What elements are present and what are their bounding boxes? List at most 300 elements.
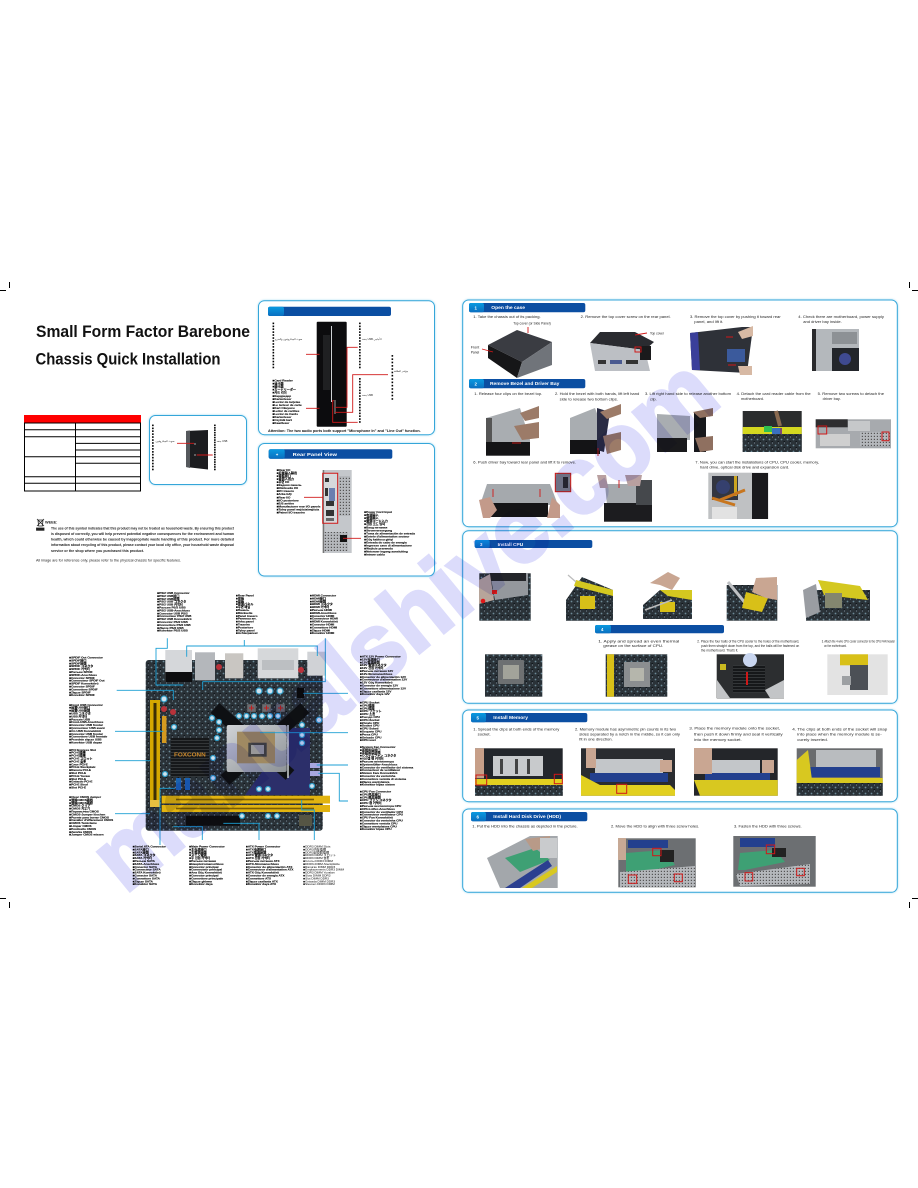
list: DDR3 slots: ■Sleuven DDR3 DIMM [303,882,335,886]
callout lines [115,638,348,845]
list: USB headers: ■USB コネクタ [69,710,91,716]
list: CPU fan: ■CPU Fan Connector [360,790,392,794]
photo: press module [694,748,778,796]
card reader list: ■讀卡器 [272,384,285,389]
power list: ■전원 코드 입력 [364,521,385,526]
list: serial ATA: ■SATA 커넥터 [133,855,152,860]
list: DDR3 slots: ■DDR3-DIMM-Steckplätze [303,862,340,866]
step text: open the case: 1. Take the chassis out of its packing. [473,315,541,319]
list: rear panel: ■背面パネル [236,601,253,606]
power list: ■Intrare cablu [364,553,385,557]
small labels: مؤشر الطاقة [394,369,409,373]
rear I/O list: ■I/O posteriore [277,498,299,502]
list: main power: ■Hauptstromanschluss [189,862,224,866]
red pointer lines [306,347,388,422]
photo: rear of chassis [590,332,654,371]
list: main power: ■Konektor daya [189,882,213,886]
list: rear connector: ■Konektor PS/2 USB [157,629,188,633]
list: USB headers: ■Front USB Connector [69,703,104,707]
step text: open the case: Panel [471,350,479,354]
list: CPU fan: ■Konektor kipas CPU [360,827,392,831]
card reader list: ■读卡器 [272,381,285,386]
list: rear connector: ■Разъем PS/2 USB [157,606,186,610]
list: HDMI connector: ■HDMI Connector [310,594,337,598]
list: CPU socket: ■CPU Socket [360,700,379,704]
heading: install memory: Install Memory [493,715,529,720]
list: PCIe slot: ■Slot PCI-E [69,771,86,775]
list: serial ATA: ■SATA Konnektörü [133,871,161,875]
list: PCIe slot: ■PCI-E Steckplatz [69,765,96,769]
list: CPU socket: ■CPU ソケット [360,708,382,713]
list: CPU fan: ■Conector da ventoinha CPU [360,818,404,822]
list: rear panel: ■背板 [236,598,245,603]
list: CPU fan: ■CPU風扇接頭 [360,794,382,799]
heading: install CPU [475,540,592,548]
list: main power: ■Conector principal [189,865,219,869]
photo: HDD fastened [733,836,816,887]
card reader list: ■Кардридер [272,394,291,398]
rear I/O list: ■Manufacturer rear I/O panels [277,504,321,508]
list: clear CMOS: ■Ponticello CMOS [69,827,96,831]
list: system fan: ■Разъем вентилятора [360,760,394,764]
side label right: منفذ USB [216,439,228,443]
list: CPU fan: ■Złącze wentylatora CPU [360,824,398,828]
list: 12V power: ■Konektor daya 12V [360,692,391,696]
rear I/O list: ■후면 I/O [277,479,290,484]
list: clear CMOS: ■清除CMOS跳线 [69,797,94,802]
list: DDR3 slots: ■DDR3 DIMM 슬롯 [303,855,329,860]
list: USB headers: ■USB 커넥터 [69,713,87,718]
list: CPU fan: ■CPU 팬 커넥터 [360,800,382,805]
photo: cpu cooler removal [479,573,531,621]
list: PCIe slot: ■Slot PCI-E [69,777,86,781]
red capacitors [161,664,304,715]
step text: open the case: 4. Check there are motherboard, power supply [798,315,884,319]
list: rear connector: ■PS/2 USB コネクタ [157,599,186,604]
list: rear panel: ■Panel trasero [236,614,258,618]
label columns: ■■■■■■■■■■■■■■ [390,355,394,400]
list: clear CMOS: ■Limpar CMOS [69,824,92,828]
list: system fan: ■System Fan Connector [360,745,396,749]
list: rear connector: ■PS/2 USB Konnektörü [157,617,192,621]
step text: remove bezel: 5. Remove two screws to detach the [818,392,884,396]
list: clear CMOS: ■Перемычка CMOS [69,810,99,814]
photo: lift driver bay [597,475,652,522]
CPU retention cross [215,708,305,780]
panel: install hard disk drive [463,809,897,892]
inset: driver bay detail [555,473,571,492]
list: ATX power: ■ATX Güç Konnektörü [246,871,279,875]
panel: front view [258,301,434,435]
list: 12V power: ■12V Güç Konnektörü [360,681,393,685]
list: USB headers: ■前置USB接頭 [69,708,91,713]
step text: install cooler: grease on the surface of CPU. [603,644,663,648]
card reader list: ■Czytnik kart [272,418,292,422]
list: DDR3 slots: ■Ranuras DIMM DDR3 [303,865,336,869]
list: CPU socket: ■CPU-voet [360,738,376,742]
photo: module notch [581,748,675,796]
power list: ■Ingresso cavo di alimentazione [364,544,412,548]
list: USB headers: ■Connecteur USB avant [69,726,105,730]
list: 12V power: ■ATX 12V Power Connector [360,654,401,658]
list: HDMI connector: ■Разъем HDMI [310,608,332,612]
list: main power: ■主电源接口 [189,846,207,851]
list: system fan: ■Systemlüfter-Anschluss [360,762,398,766]
list: SPDIF connector: ■SPDIF 커넥터 [69,666,90,671]
panel: install CPU and cooler [463,531,897,703]
photo: driver bay screws [816,419,891,448]
photo: socket closed [566,575,613,621]
list: CPU socket: ■Presa CPU [360,732,378,736]
list: system fan: ■Złącze wentylatora [360,780,390,784]
24-pin connector [186,816,240,826]
card reader list: ■Lector de tarjetas [272,400,300,404]
card reader list: ■Le lecteur de carte [272,403,302,407]
heading: remove bezel [469,379,585,388]
card reader list: ■카드 리더 [272,390,287,395]
list: system fan: ■Konektor kipas sistem [360,783,395,787]
heading: install memory: 5 [476,716,480,721]
list: DDR3 slots: ■Gniazda DIMM DDR3 [303,879,335,883]
list: system fan: ■システムファン コネクタ [360,753,396,758]
list: PCIe slot: ■PCI-E插槽 [69,750,86,755]
step text: memory: sides separated by a notch in the middle, so it can only [579,732,680,736]
list: 12V power: ■12V電源接頭 [360,659,381,664]
crop marks [0,282,918,908]
list: 12V power: ■12V电源接口 [360,656,380,661]
list: PCIe slot: ■Слот PCI-E [69,762,88,766]
step text: open the case: Front [471,346,480,350]
CPU socket [227,725,288,778]
list: 12V power: ■Conector de energia 12V [360,684,399,688]
list: clear CMOS: ■Puente para borrar CMOS [69,815,109,819]
list: 12V power: ■12V 電源コネクタ [360,662,387,667]
card reader list: ■Lector de Cards [272,412,298,416]
photo: lift bezel [657,408,713,452]
list: clear CMOS: ■Clear CMOS Jumper [69,795,102,799]
step text: remove bezel: clip. [650,398,657,402]
power list: ■Netsnoer ingang aansluiting [364,550,408,554]
photo: module seated [797,748,883,796]
heatsink: FOXCONN [174,752,206,758]
heading: install HDD: 6 [476,815,480,820]
list: ATX power: ■ATX Power Connector [246,844,281,848]
list: HDMI connector: ■Konektor HDMI [310,631,334,635]
list: rear panel: ■背板 [236,595,245,600]
list: CPU socket: ■Zócalo CPU [360,721,380,725]
photo: assembled interior [708,473,768,519]
list: 12V power: ■Разъем питания 12V [360,669,394,673]
list: USB headers: ■Konektor USB depan [69,740,102,744]
card reader list: ■Kartenleser [272,397,292,401]
list: serial ATA: ■Разъем SATA [133,859,156,863]
photo: hold bezel [570,404,621,456]
rear I/O list: ■Rear I/O [277,495,291,499]
list: HDMI connector: ■HDMI Konnektörü [310,620,338,624]
list: PCIe slot: ■PCI Express Slot [69,748,96,752]
step text: HDD: 1. Put the HDD into the chassis as depicted in the picture. [472,824,578,828]
list: SPDIF connector: ■Konektor SPDIF [69,693,95,697]
list: ATX power: ■Złącze zasilania ATX [246,879,279,883]
list: CPU fan: ■CPU Fan Konnektörü [360,816,393,820]
list: USB headers: ■Connettore USB frontale [69,735,108,739]
step text: memory: 2. Memory module has asymmetric pin counts in its two [575,727,676,731]
step text: open the case: Top cover [650,332,665,336]
list: serial ATA: ■SATA-Anschluss [133,862,159,866]
rear I/O list: ■Rückseite I/O [277,486,299,490]
power list: ■電源コード入力 [364,518,388,523]
list: rear panel: ■Posteriore [236,625,253,629]
step text: open the case [471,315,884,354]
header bar: Rear Panel View [293,452,338,457]
photo: push driver bay [479,484,560,518]
list: system fan: ■系統風扇接頭 [360,750,381,755]
attention note: Attention: The two audio ports both support "Microphone In" and "Line Out" function. [268,428,421,433]
label columns: ■■■■■■■■■■■■■■■■ [358,322,362,369]
list: CPU fan: ■Connettore ventola CPU [360,821,398,825]
list: USB headers: ■前置USB接口 [69,705,90,710]
power list: ■Entrée d'alimentation secteur [364,534,410,538]
list: serial ATA: ■Conector SATA [133,874,158,878]
list: serial ATA: ■Conector SATA [133,865,158,869]
list: PCIe slot: ■PCI-E Sleuf [69,783,89,787]
step text: driver bay [473,460,819,470]
list: HDMI connector: ■Conector HDMI [310,614,334,618]
heading: install CPU: 3 [480,542,483,547]
label columns: ■■■■■■■■■■■■■■■■ [358,378,362,423]
heading: open the case: 1 [474,306,478,311]
list: rear connector: ■Conector PS/2 USB [157,620,188,624]
board [146,660,323,831]
power list: ■Entrada do cabo de energia [364,540,407,544]
dark connector [297,688,304,698]
list: system fan: ■Connettore ventola di sistema [360,777,406,781]
WEEE notice [36,519,235,562]
list: rear connector: ■Connecteur PS/2 USB [157,614,192,618]
power list: ■Вход питания [364,525,387,529]
WEEE paragraph: is disposed of correctly, you will help prevent potential negative consequences for the environment and human [51,532,235,536]
WEEE paragraph: health, which could otherwise be caused by inappropriate waste handling of this product. For more detailed [51,538,235,542]
step text: install cooler [598,639,895,652]
power list: ■Güç kablosu girişi [364,537,393,541]
step text: memory [473,726,887,742]
list: ATX power: ■Connettore ATX [246,876,272,880]
step text: memory: curely inserted. [797,738,828,742]
SATA connectors [176,778,190,790]
list: system fan: ■系统风扇接口 [360,747,380,752]
step text: open the case: 2. Remove the top cover screw on the rear panel. [581,315,671,319]
list: rear panel: ■Rear Panel [236,594,254,598]
list: ATX power: ■ATX-Stromanschluss [246,862,279,866]
rear I/O list: ■E/S arrière [277,501,294,505]
step text: open the case: panel, and lift it. [694,320,723,324]
WEEE paragraph: The use of this symbol indicates that this product may not be treated as household waste. By ensuring this product [51,526,235,530]
header bar: ✦ [275,452,279,457]
panel: install memory [463,710,897,802]
small labels: صوت الميكروفون والخرج [275,337,303,341]
list: PCIe slot: ■Ranura PCI-E [69,768,91,772]
step text: remove bezel: 3. Lift right hand side to release another bottom [645,392,731,396]
list: SPDIF connector: ■SPDIF コネクタ [69,663,93,668]
label columns: ■■■■■■■■■■■■■■■■ [271,322,275,369]
list: DDR3 slots: ■DDR3 DIMM スロット [303,852,336,857]
power list: ■Stromversorgung [364,528,392,532]
power list: ■Toma de alimentación de entrada [364,531,415,535]
list: clear CMOS: ■CMOS クリア [69,803,91,808]
step text: remove bezel: motherboard. [741,397,764,401]
list: CPU socket: ■CPU-Sockel [360,718,380,722]
step text: driver bay: 7. Now, you can start the installations of CPU, CPU cooler, memory, [695,460,819,464]
list: rear connector: ■PS/2 USB 커넥터 [157,602,183,607]
step text: memory: 4. The clips at both ends of the socket will snap [792,727,887,731]
list: USB headers: ■Przednie złącze USB [69,738,102,742]
list: USB headers: ■Conector USB frontal [69,723,103,727]
photo: cooler fastening [717,653,784,698]
list: rear panel: ■Панель [236,608,249,612]
list: SPDIF connector: ■SPDIF Konnektörü [69,682,99,686]
power list: ■电源输入 [364,512,379,517]
step text: install cooler: the motherboard. That's it. [701,648,738,652]
list: 12V power: ■12V 전원 커넥터 [360,665,383,670]
photo: socket locked [485,654,542,697]
list: HDMI connector: ■Connecteur HDMI [310,617,338,621]
list: SPDIF connector: ■Connettore SPDIF [69,687,98,691]
list: rear panel: ■Rückseite [236,611,253,615]
photo: spread clips [475,748,563,796]
list: rear panel: ■Traseiro [236,622,250,626]
list: clear CMOS: ■清除CMOS跳線 [69,800,94,805]
list: HDMI connector: ■HDMI-Anschluss [310,611,337,615]
tower rear photo [323,470,352,553]
list: DDR3 slots: ■Emplacements DDR3 DIMM [303,868,344,872]
list: system fan: ■Conector da ventoinha [360,774,396,778]
WEEE paragraph: information about recycling of this product, please contact your local city office, your household waste disposal [51,543,234,547]
photo: bezel clips [486,406,539,456]
rear I/O list: ■背板接口 [277,473,291,478]
rear I/O list: ■背面入出力 [277,476,294,481]
side label left: صوت الميكروفون [156,439,175,443]
list: ATX power: ■Разъем питания ATX [246,859,281,863]
list: clear CMOS: ■Cavalier d'effacement CMOS [69,818,113,822]
WEEE heading: WEEE: [45,520,57,524]
list: USB headers: ■Ön USB Konnektörü [69,729,101,733]
list: PCIe slot: ■PCI-E插槽 [69,753,86,758]
list: SPDIF connector: ■SPDIF-Anschluss [69,673,97,677]
rear I/O list: ■后置输入输出 [277,470,297,475]
card reader list: ■Leitor de cartões [272,409,300,413]
photo: chassis [482,327,552,378]
small labels: منفذ USB الأمامي [362,337,382,341]
rear I/O list: ■Painel I/O traseiro [277,510,305,514]
list: ATX power: ■Konektor daya ATX [246,882,277,886]
list: main power: ■主電源接頭 [189,849,208,854]
power list: ■電源輸入 [364,515,379,520]
list: CPU fan: ■Разъем вентилятора CPU [360,804,402,808]
panel: side view [150,416,246,484]
heading: install memory [471,713,587,722]
step text: install cooler: push them straight down from the top, and the balls will be fastened on [701,644,799,648]
step text: open the case: Top cover (or Side Panel) [513,322,551,326]
list: CPU fan: ■Connecteur ventilateur CPU [360,813,404,817]
list: rear panel: ■Achterpaneel [236,631,258,635]
list: CPU fan: ■CPU ファン コネクタ [360,797,392,802]
list: USB headers: ■Conector USB frontal [69,732,103,736]
step text: driver bay: hard drive, optical disk drive and expansion card. [700,466,789,470]
PCIe slot [150,700,160,807]
list: SPDIF connector: ■Connecteur SPDIF Out [69,679,105,683]
card reader list: ■Card Reader [272,378,294,382]
step text: HDD [472,824,802,828]
photo: card reader cable [743,411,802,452]
card reader list: ■Kaartlezer [272,421,290,425]
motherboard label lists [69,591,414,886]
list: HDMI connector: ■HDMI コネクタ [310,601,333,606]
list: rear connector: ■Conector USB PS/2 [157,611,188,615]
photo: HDD aligned [618,838,696,887]
step text: HDD: 3. Fasten the HDD with three screws. [734,824,802,828]
list: PCIe slot: ■PCI-E Yuvası [69,774,90,778]
list: rear connector: ■Złącze PS/2 USB [157,626,184,630]
specification table [24,415,141,491]
photo: chassis interior [812,329,859,371]
list: PCIe slot: ■Slot PCI-E [69,786,86,790]
small chassis side [186,430,208,470]
step text: memory: socket. [478,732,491,736]
list: rear connector: ■PS/2 USB Connector [157,591,190,595]
list: main power: ■Złącze główne [189,879,212,883]
list: serial ATA: ■Connecteur SATA [133,868,161,872]
list: clear CMOS: ■CMOS Temizleme [69,821,97,825]
list: serial ATA: ■SATA接頭 [133,849,150,854]
header bar [269,449,392,459]
list: CPU socket: ■CPU插座 [360,702,375,707]
list: 12V power: ■Złącze zasilania 12V [360,689,392,693]
title line 2: Chassis Quick Installation [36,350,220,368]
list: ATX power: ■ATX電源接頭 [246,849,267,854]
power list: ■Wejście przewodu [364,547,393,551]
step text: memory: 3. Place the memory module onto the socket, [689,726,780,730]
small labels: منفذ USB [362,393,373,397]
list: HDMI connector: ■HDMI接口 [310,595,326,600]
list: HDMI connector: ■HDMI 커넥터 [310,604,329,609]
list: main power: ■メイン電源 [189,852,208,857]
list: CPU fan: ■CPU风扇接口 [360,791,381,796]
photo: open socket [803,580,870,621]
heading: install cooler: 4 [601,627,604,632]
panel: open the case and remove bezel [463,300,897,527]
list: CPU fan: ■Conector de ventilador CPU [360,810,404,814]
heatsink [171,738,209,777]
step text: driver bay: 6. Push driver bay toward rear panel and lift it to remove. [473,460,576,464]
list: clear CMOS: ■CMOS-Jumper löschen [69,812,105,816]
list: serial ATA: ■Konektor SATA [133,882,158,886]
list: ATX power: ■ATX 전원 커넥터 [246,855,270,860]
list: serial ATA: ■Złącze SATA [133,879,154,883]
list: system fan: ■Connecteur de ventilateur [360,768,401,772]
step text: remove bezel: side to release two bottom clips. [560,398,618,402]
list: 12V power: ■12V-Stromanschluss [360,672,393,676]
list: USB headers: ■Разъем USB [69,717,91,721]
label column left: ■■■■■■■■■■■■■■■■ [151,424,155,471]
step text: install cooler: 2. Place the four balls of the CPU cooler to the holes of the motherboard, [697,639,799,643]
list: ATX power: ■Conector de alimentación ATX [246,865,293,869]
step text: remove bezel [474,392,884,402]
list: CPU socket: ■Gniazdo CPU [360,735,382,739]
red highlight [323,473,338,523]
photo: lift lever [643,572,692,619]
rear I/O list: ■I/O trasero [277,489,294,493]
list: main power: ■Ana Güç Konnektörü [189,871,222,875]
